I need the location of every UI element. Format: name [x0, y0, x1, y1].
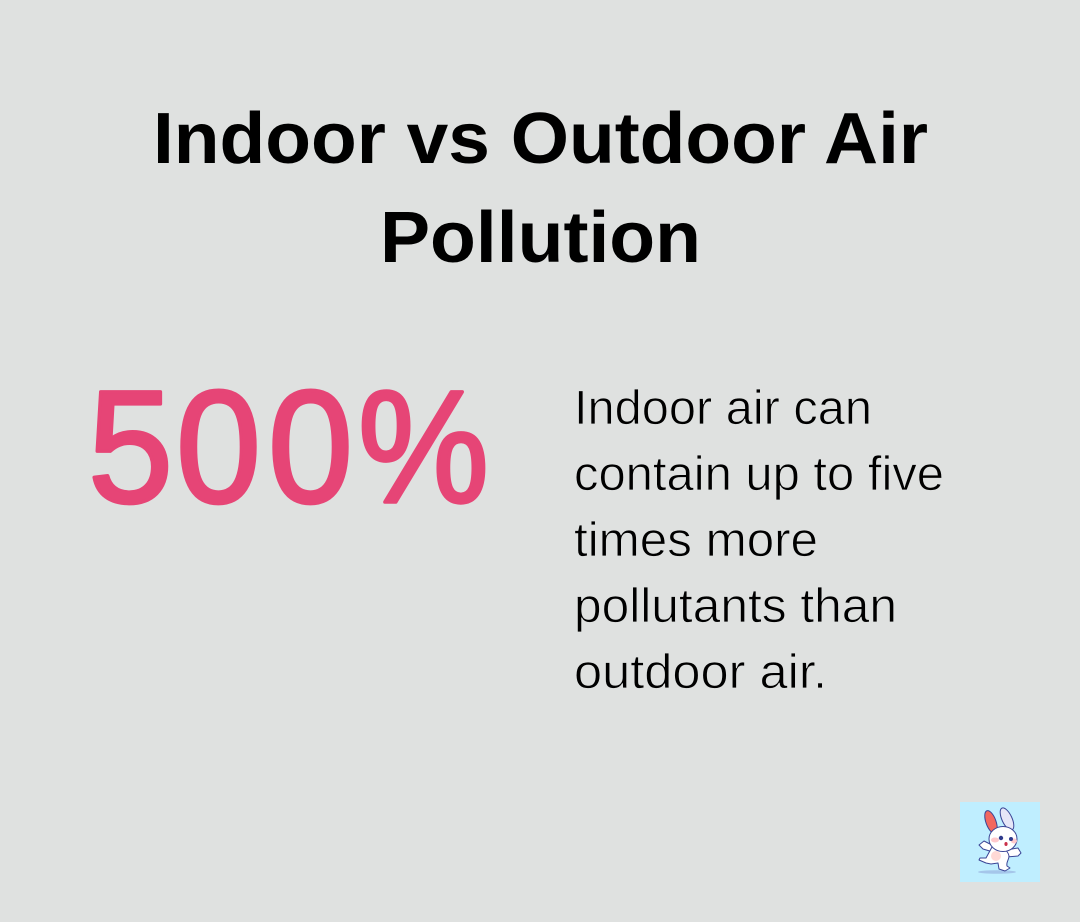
description text — [574, 382, 944, 699]
description text: Indoor air can — [574, 382, 872, 435]
big statistic: 500%: 5 — [88, 357, 173, 536]
big statistic: 500% — [88, 357, 489, 536]
title: Pollution — [380, 198, 701, 278]
description text: contain up to five — [574, 448, 944, 501]
description text: outdoor air. — [574, 646, 827, 699]
title: Indoor vs Outdoor Air — [153, 99, 928, 179]
big statistic: 500%: % — [358, 357, 489, 536]
description text: pollutants than — [574, 580, 897, 633]
title — [153, 99, 928, 278]
description text: times more — [574, 514, 818, 567]
big statistic: 500%: 0 — [268, 357, 353, 536]
icon: running rabbit logo — [960, 802, 1040, 882]
big statistic: 500%: 0 — [176, 357, 261, 536]
